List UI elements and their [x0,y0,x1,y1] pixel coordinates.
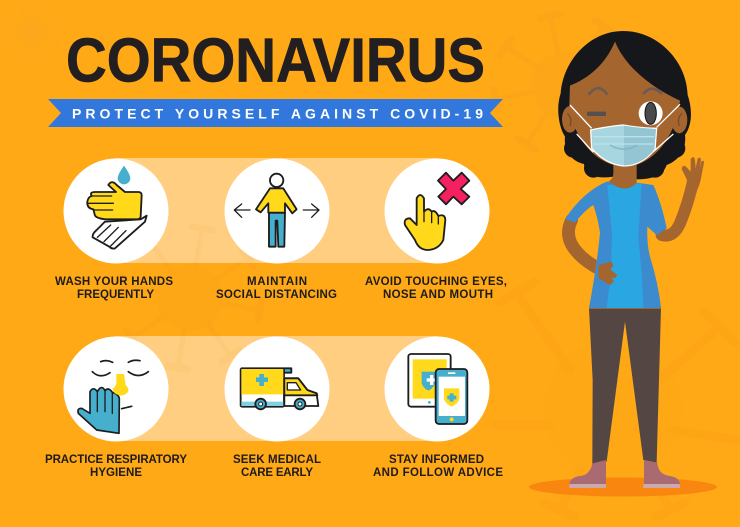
band: row 1 [115,158,438,263]
icon: washing hands [87,166,147,249]
label: social distancing [216,276,337,301]
circle: wash hands [64,158,168,264]
mask straps [570,104,680,152]
banner [48,99,503,127]
label: social distancing: SOCIAL DISTANCING [216,289,337,301]
open eye [639,101,663,125]
icon: hand and cross [405,173,469,250]
label: social distancing: MAINTAIN [247,276,307,288]
label: stay informed [373,454,503,479]
hair [558,31,691,179]
circle: social distancing [224,158,330,264]
label: medical care: CARE EARLY [241,467,313,479]
label: medical care: SEEK MEDICAL [233,454,321,466]
upper body and head [558,31,704,308]
title: CORONAVIRUS [66,26,485,96]
label: avoid touching: NOSE AND MOUTH [383,289,493,301]
mask [591,125,657,166]
left arm [568,220,605,272]
label: stay informed: STAY INFORMED [389,454,484,466]
icon: person with arrows [234,174,319,247]
icon: tablet and phone [408,354,467,424]
ground shadow [529,478,717,496]
neck [609,160,637,189]
label: avoid touching: AVOID TOUCHING EYES, [365,276,507,288]
background virus: lower right [495,282,735,517]
closed eye [587,112,606,116]
circle: respiratory hygiene [64,336,168,442]
left hand [598,262,617,285]
label: respiratory hygiene: PRACTICE RESPIRATORY [45,454,187,466]
icon: face and hand [78,360,148,433]
right arm [662,180,693,236]
right hand [682,157,704,197]
label: medical care [233,454,321,479]
label: wash hands: WASH YOUR HANDS [55,276,173,288]
banner text: PROTECT YOURSELF AGAINST COVID-19 [72,106,483,122]
circle: avoid touching [384,158,490,264]
faint virus on bands [108,216,272,380]
label: wash hands [55,276,173,301]
face [569,42,680,167]
background virus: behind figure [481,1,649,169]
figure: woman in mask [529,31,717,496]
circle: stay informed [384,336,490,442]
shirt [565,182,667,308]
label: stay informed: AND FOLLOW ADVICE [373,467,503,479]
background virus: top left [0,0,70,70]
label: respiratory hygiene [45,454,187,479]
eyebrows [589,88,662,95]
label: respiratory hygiene: HYGIENE [90,467,142,479]
label: avoid touching [365,276,507,301]
icon: ambulance [241,368,318,409]
circle: medical care [224,336,330,442]
band: row 2 [115,336,438,441]
ears [562,106,578,133]
background virus: centre [108,216,272,380]
legs and shoes [569,308,680,488]
label: wash hands: FREQUENTLY [77,289,154,301]
